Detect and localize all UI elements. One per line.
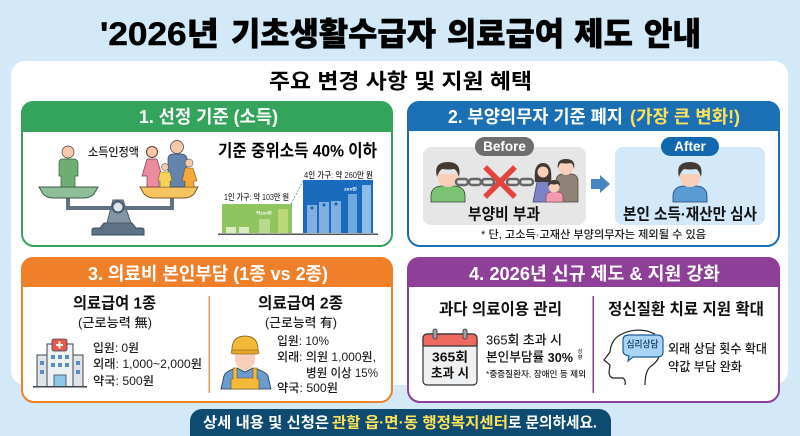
panel 4 header [407,257,780,287]
column: overuse management: *중증질환자, 장애인 등 제외 [486,369,586,379]
before pill [475,137,534,156]
panel 4 header: 4. 2026년 신규 제도 & 지원 강화 [469,264,720,284]
title [100,16,701,52]
panel 2 header: (가장 큰 변화!) [630,107,740,127]
label: income: 소득인정액 [88,146,139,159]
icon: head with speech bubble [604,330,663,385]
column: type 1: 외래: 1,000~2,000원 [93,357,202,371]
chart: household amounts: 4인 가구: 약 260만 원 [304,170,373,180]
footer banner: 로 문의하세요. [508,414,597,432]
title: 의료급여 [447,16,564,52]
chart: household amounts: 260만 [344,186,357,192]
footer banner: 상세 내용 및 신청은 [203,414,329,432]
white content panel [11,61,788,385]
chart: household amounts: 1인 가구: 약 103만 원 [224,192,289,202]
title: 기초생활수급자 [231,16,436,52]
column: type 2: 의료급여 2종 [258,294,343,312]
after card [615,137,765,225]
column: overuse management [423,300,586,385]
icon: calendar: 365회 [432,350,468,364]
column: type 2: 병원 이상 15% [306,366,378,380]
icon: head with speech bubble: 심리상담 [626,338,659,350]
panel 2 header [407,101,780,131]
icon: hospital [33,339,87,388]
title: '2026년 [100,16,219,52]
icon: balance scale with person and family [39,140,198,235]
icon: worker [221,336,271,389]
footer banner [190,409,611,436]
arrow [591,175,610,193]
icon: chained family with red cross [431,159,578,202]
column: type 2: (근로능력 有) [265,316,337,330]
panel 3 header: 3. 의료비 본인부담 (1종 vs 2종) [88,264,328,284]
panel 1 header [21,101,393,132]
column: type 2: 약국: 500원 [277,381,338,395]
icon: person [673,162,707,202]
column: overuse management: 상 [578,348,583,355]
after caption: 본인 소득·재산만 심사 [623,206,757,224]
subtitle: 주요 변경 사항 및 지원 혜택 [269,70,532,94]
before pill: Before [483,139,526,154]
icon: calendar [423,329,477,385]
column: type 1: 약국: 500원 [93,374,154,388]
column: overuse management: 향 [578,354,583,361]
note: * 단, 고소득·고재산 부양의무자는 제외될 수 있음 [481,228,706,241]
chart: household amounts: 약100만 [256,210,272,216]
panel 4: new 2026 programs [407,257,780,402]
heading: median income 40%: 기준 중위소득 40% 이하 [218,142,377,160]
column: mental health support [604,300,767,385]
title: 안내 [644,16,701,52]
column: type 2 [221,294,378,395]
panel 1 header: 1. 선정 기준 (소득) [139,107,278,127]
panel 3 header [21,257,393,287]
column: type 2: 입원: 10% [277,334,329,348]
column: mental health support: 정신질환 치료 지원 확대 [608,300,764,318]
panel 3: out-of-pocket costs [21,257,393,402]
panel 2 header: 2. 부양의무자 기준 폐지 [448,107,623,127]
panel 1: selection criteria [21,101,393,246]
after pill [661,137,719,156]
column: overuse management: 365회 초과 시 [486,332,562,348]
footer banner: 관할 읍·면·동 행정복지센터 [332,414,508,432]
column: mental health support: 외래 상담 횟수 확대 [668,342,767,356]
column: type 1 [33,294,202,388]
column: mental health support: 약값 부담 완화 [668,360,742,374]
chart: household amounts [218,170,378,235]
column: overuse management: 과다 의료이용 관리 [439,300,562,318]
column: overuse management: 본인부담률 30% [486,350,573,364]
title: 제도 [574,16,633,52]
column: type 1: 의료급여 1종 [73,294,156,312]
column: type 1: 입원: 0원 [93,341,139,355]
before caption: 부양비 부과 [468,206,540,224]
panel 2: abolition of support obligor rule [407,101,780,246]
column: type 1: (근로능력 無) [78,315,152,330]
before card [423,137,586,225]
after pill: After [674,139,706,154]
icon: calendar: 초과 시 [431,366,469,380]
column: type 2: 외래: 의원 1,000원, [277,350,376,364]
